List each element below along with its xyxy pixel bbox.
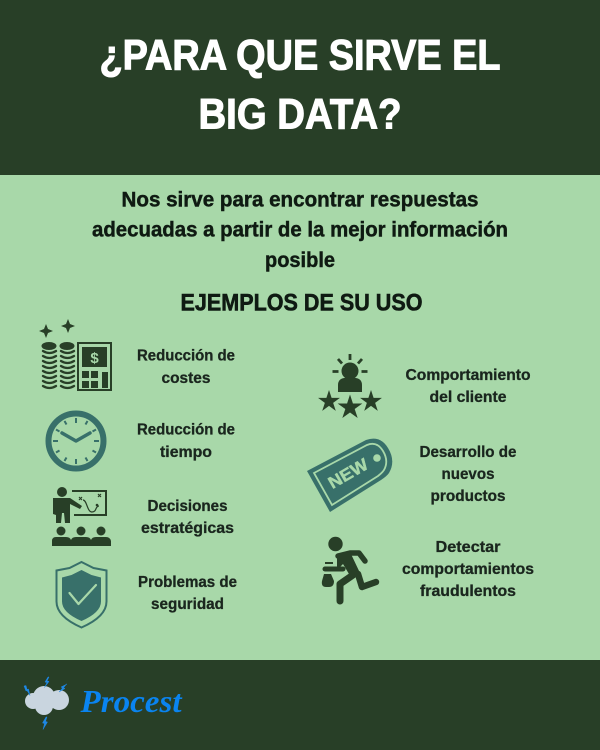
label: detectar comportamientos fraudulentos: comportamientos: [402, 561, 534, 578]
icon: presenter with audience: [52, 487, 111, 546]
icon: shield with check: [56, 562, 106, 628]
icon: coins and calculator: $: [90, 350, 99, 367]
label: reducción de costes: [137, 348, 235, 387]
label: reducción de tiempo: tiempo: [160, 444, 212, 461]
label: problemas de seguridad: [138, 574, 237, 613]
icon: customer rating: [318, 354, 382, 418]
label: detectar comportamientos fraudulentos: [402, 539, 534, 600]
label: desarrollo de nuevos productos: Desarrollo de: [420, 444, 517, 461]
label: reducción de costes: costes: [162, 370, 211, 387]
header band: [0, 0, 600, 175]
icon: cloud with lightning: [24, 677, 69, 730]
intro text: adecuadas a partir de la mejor información: [92, 218, 508, 242]
label: reducción de costes: Reducción de: [137, 348, 235, 364]
label: decisiones estratégicas: [141, 498, 234, 537]
wordmark: Procest: [79, 683, 183, 719]
icon: new tag: [307, 439, 392, 512]
icon: running thief: [322, 537, 376, 601]
icon: new tag: NEW: [325, 454, 373, 493]
label: comportamiento del cliente: [406, 367, 531, 406]
title: BIG DATA?: [198, 90, 402, 138]
intro text: Nos sirve para encontrar respuestas: [122, 188, 478, 212]
label: desarrollo de nuevos productos: [420, 444, 517, 505]
intro text: [92, 188, 508, 272]
label: desarrollo de nuevos productos: productos: [430, 488, 506, 505]
icon: clock: [48, 414, 104, 468]
label: comportamiento del cliente: Comportamiento: [406, 367, 531, 384]
label: desarrollo de nuevos productos: nuevos: [442, 466, 495, 483]
label: problemas de seguridad: seguridad: [151, 596, 224, 613]
footer band: [0, 660, 600, 750]
intro text: posible: [265, 249, 335, 272]
label: reducción de tiempo: [137, 422, 235, 461]
section heading: EJEMPLOS DE SU USO: [180, 290, 422, 316]
label: decisiones estratégicas: estratégicas: [141, 520, 234, 537]
label: decisiones estratégicas: Decisiones: [148, 498, 228, 515]
title: ¿PARA QUE SIRVE EL: [100, 32, 500, 80]
label: reducción de tiempo: Reducción de: [137, 422, 235, 438]
label: detectar comportamientos fraudulentos: Detectar: [436, 539, 500, 556]
label: problemas de seguridad: Problemas de: [138, 574, 237, 591]
label: detectar comportamientos fraudulentos: fraudulentos: [420, 583, 516, 600]
title: [100, 32, 500, 138]
icon: coins and calculator: [39, 319, 112, 391]
logo: Procest: [24, 677, 183, 730]
label: comportamiento del cliente: del cliente: [430, 389, 507, 406]
